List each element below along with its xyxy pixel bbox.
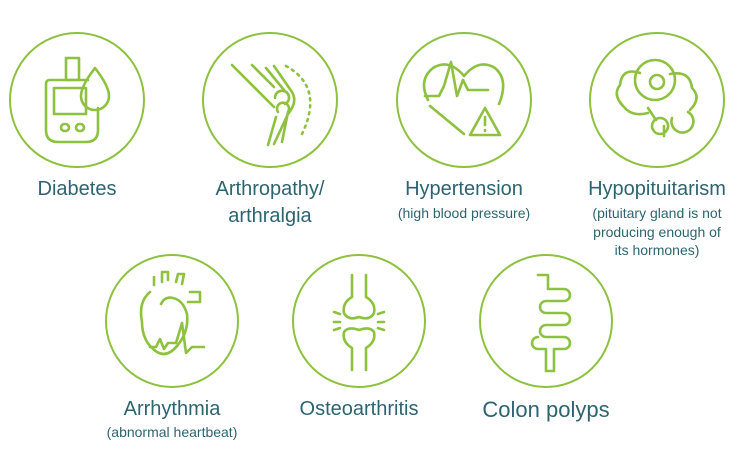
label: Osteoarthritis: Osteoarthritis [300,398,418,420]
label: Arthropathy/arthralgia: Arthropathy/ [216,178,325,200]
circle: hypopituitarism [590,33,724,167]
label: Diabetes: Diabetes [38,178,116,200]
item: hypopituitarism: producing enough of [593,224,721,240]
circle: colon polyps [480,255,612,387]
item: hypertension [397,33,531,221]
circle: diabetes [10,33,144,167]
item: arthropathy: arthralgia [228,205,313,227]
item: colon polyps [480,255,612,422]
item: hypertension: (high blood pressure) [398,205,530,221]
icon: heart ecg [141,272,204,354]
circle: arthropathy [203,33,337,167]
icon: brain pituitary [617,60,697,136]
item: arthropathy [203,33,337,227]
icon: bone joint [334,275,384,370]
icon: glucose meter [46,58,109,142]
item: hypopituitarism [588,33,726,258]
item: arrhythmia: (abnormal heartbeat) [107,424,237,440]
icon: heart warning [424,62,503,135]
circle: osteoarthritis [293,255,425,387]
icon: knee [232,65,310,145]
label: Colon polyps: Colon polyps [482,397,610,422]
item: hypopituitarism: (pituitary gland is not [592,205,722,221]
item: hypopituitarism: its hormones) [615,242,699,258]
circle: hypertension [397,33,531,167]
circle: arrhythmia [106,255,238,387]
label: Hypertension: Hypertension [405,178,523,200]
item: arrhythmia [106,255,238,440]
icon: intestine [532,275,570,371]
label: Arrhythmia: Arrhythmia [124,398,221,420]
label: Hypopituitarism: Hypopituitarism [588,178,726,200]
item: diabetes [10,33,144,200]
item: osteoarthritis [293,255,425,420]
